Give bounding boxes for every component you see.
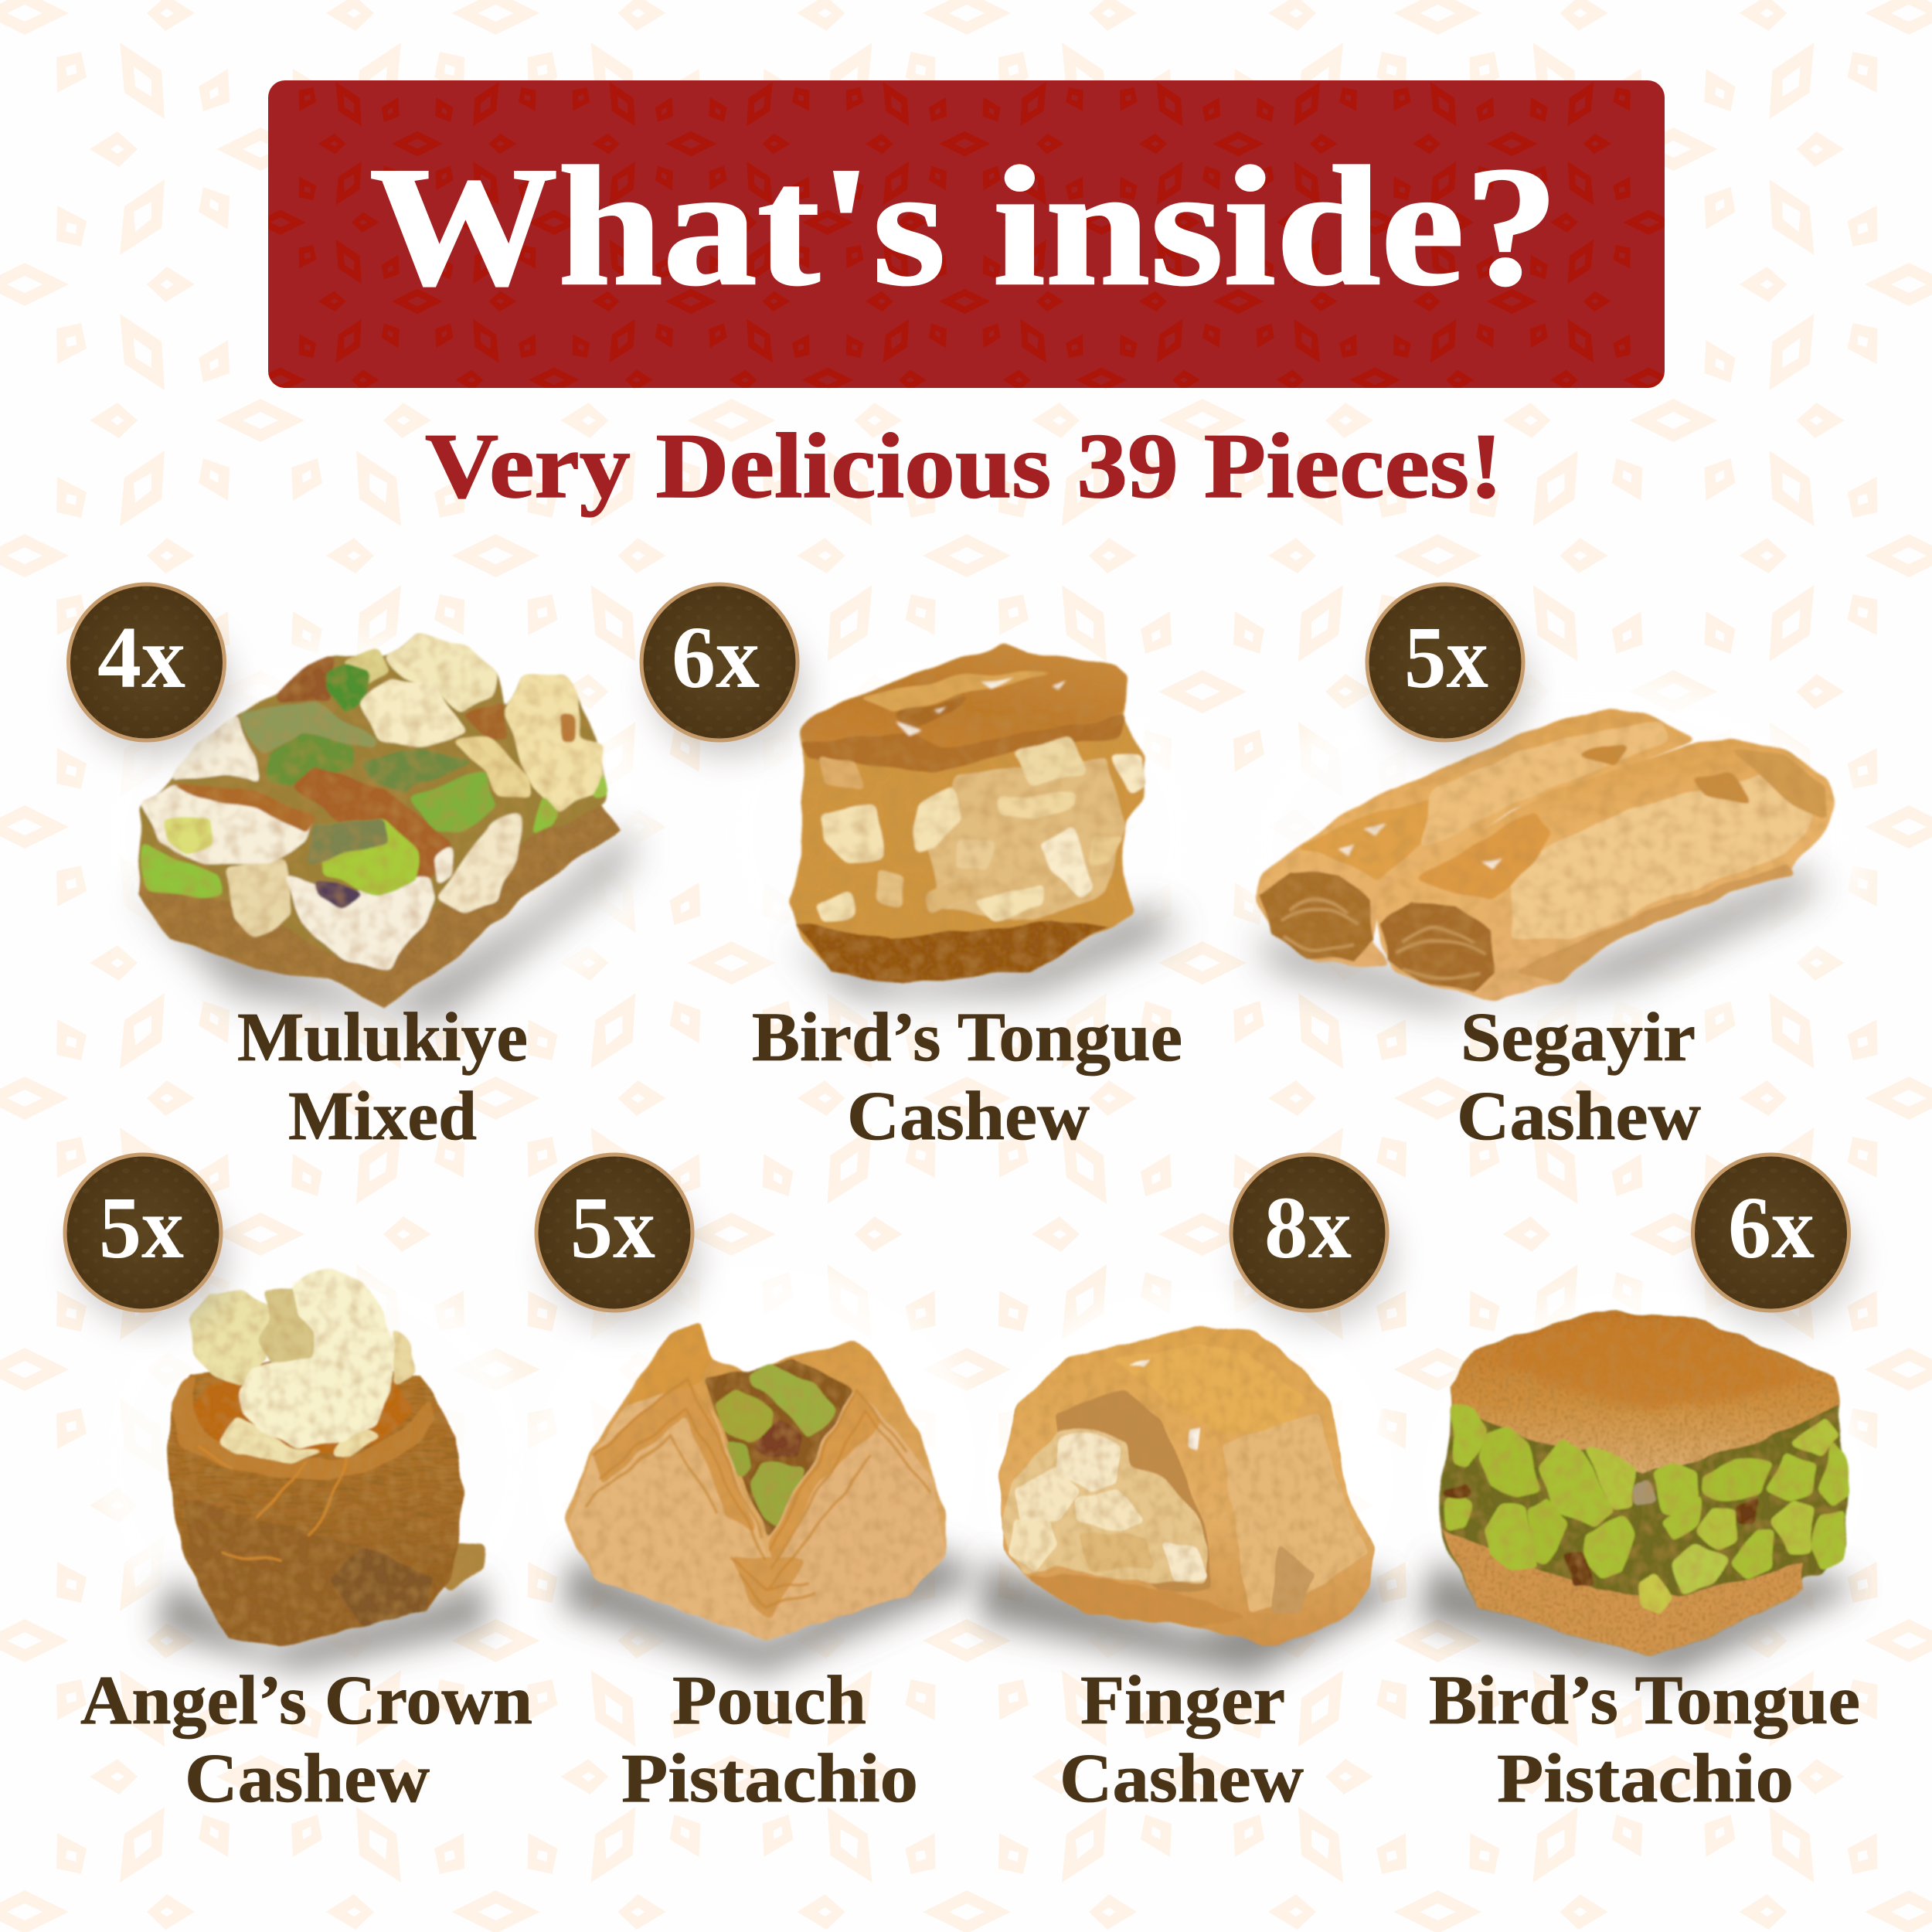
food: Finger (979, 1284, 1404, 1677)
panel: Finger Cashew (979, 1155, 1404, 1817)
subtitle: Very Delicious 39 Pieces! (425, 414, 1503, 517)
badge: 6x (1692, 1155, 1856, 1328)
panel: Bird's Tongue Cashew (641, 584, 1206, 1155)
label: Bird's Tongue Pistachio: Pistachio (1497, 1740, 1794, 1817)
badge: 5x: 5x (1404, 608, 1488, 706)
food: Bird's Tongue Cashew (717, 639, 1206, 1029)
badge: 6x: 6x (1728, 1179, 1815, 1277)
label: Bird's Tongue Pistachio: Bird’s Tongue (1429, 1662, 1860, 1739)
banner: What's inside? (268, 80, 1665, 388)
badge: 4x (68, 584, 232, 757)
label: Finger Cashew (1060, 1662, 1304, 1817)
food: Segayir (1236, 669, 1867, 1029)
label: Angel's Crown Cashew (80, 1662, 532, 1817)
badge: 5x: 5x (99, 1179, 184, 1277)
badge: 5x (65, 1155, 229, 1328)
badge: 4x: 4x (97, 608, 185, 706)
label: Bird's Tongue Pistachio (1429, 1662, 1860, 1817)
badge: 5x (1367, 584, 1531, 757)
label: Bird's Tongue Cashew: Bird’s Tongue (752, 999, 1182, 1076)
panel: Mulukiye Mixed (68, 584, 661, 1155)
label: Pouch Pistachio (621, 1662, 918, 1817)
badge: 5x (536, 1155, 700, 1328)
label: Angel's Crown Cashew: Cashew (185, 1740, 430, 1817)
label: Pouch Pistachio: Pouch (672, 1662, 866, 1739)
label: Finger Cashew: Cashew (1060, 1740, 1304, 1817)
food: Angel's Crown (94, 1261, 535, 1670)
label: Mulukiye Mixed (237, 999, 528, 1155)
title: What's inside? (369, 131, 1559, 321)
label: Bird's Tongue Cashew (752, 999, 1182, 1155)
badge: 6x: 6x (672, 608, 760, 706)
food: Pouch (532, 1261, 981, 1673)
food: Bird's Tongue Pistachio (1418, 1284, 1868, 1677)
panel: Bird's Tongue Pistachio (1418, 1155, 1868, 1817)
label: Segayir Cashew: Segayir (1461, 999, 1696, 1076)
badge: 5x: 5x (570, 1179, 655, 1277)
label: Mulukiye Mixed: Mixed (288, 1078, 477, 1155)
food: Mulukiye (91, 634, 661, 1029)
label: Segayir Cashew (1457, 999, 1701, 1155)
label: Segayir Cashew: Cashew (1457, 1078, 1701, 1155)
label: Bird's Tongue Cashew: Cashew (847, 1078, 1090, 1155)
badge: 6x (641, 584, 805, 757)
badge: 8x: 8x (1264, 1179, 1352, 1277)
label: Finger Cashew: Finger (1080, 1662, 1285, 1739)
panel: Pouch Pistachio (532, 1155, 981, 1817)
label: Mulukiye Mixed: Mulukiye (237, 999, 528, 1076)
panel: Angel's Crown Cashew (65, 1155, 535, 1817)
panel: Segayir Cashew (1236, 584, 1867, 1155)
label: Pouch Pistachio: Pistachio (621, 1740, 918, 1817)
label: Angel's Crown Cashew: Angel’s Crown (80, 1662, 532, 1739)
badge: 8x (1231, 1155, 1395, 1328)
